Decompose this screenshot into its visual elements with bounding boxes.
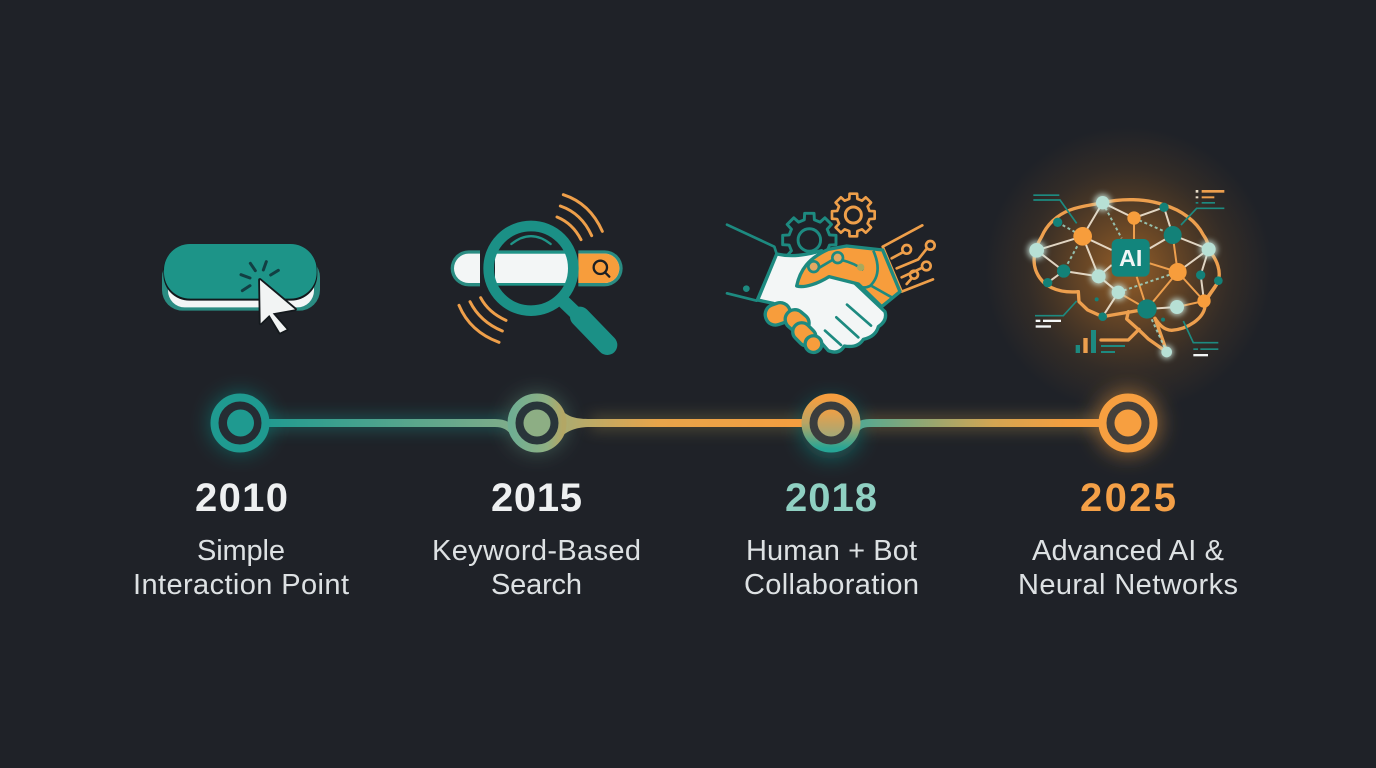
orange nodes (1073, 211, 1211, 308)
icon: button with cursor (2010) (162, 244, 320, 333)
dashed links (1058, 203, 1178, 352)
milestone 2018 text (744, 476, 919, 601)
node: 2018 (806, 398, 856, 448)
pale node glows (1027, 194, 1217, 359)
icon: orange gear (832, 194, 875, 236)
robot arm cuff with circuit traces (883, 225, 935, 292)
milestone 2025 text: Neural Networks (1018, 569, 1238, 601)
robot hand (797, 246, 900, 307)
pale nodes (1029, 196, 1216, 357)
milestone 2018 text: Human + Bot (746, 535, 917, 567)
node: 2010 (214, 398, 266, 448)
milestone 2025 text: Advanced AI & (1032, 535, 1224, 567)
brain outline (1034, 200, 1219, 352)
milestone 2010 text: Simple (197, 535, 285, 567)
timeline (210, 390, 1161, 459)
data callouts (1033, 200, 1224, 343)
milestone 2015 text: Keyword-Based (432, 535, 641, 567)
milestone 2010 text: Interaction Point (133, 569, 349, 601)
teal nodes (1043, 203, 1223, 322)
node: 2025 (1102, 398, 1154, 448)
milestone 2025 text (1018, 476, 1238, 601)
mini bar chart (1076, 330, 1096, 353)
icon: AI neural network brain (2025) (985, 127, 1272, 413)
milestone 2018 text: Collaboration (744, 569, 919, 601)
connector lines (262, 407, 1105, 439)
milestone 2015 text (432, 476, 641, 601)
line glow (262, 417, 1103, 429)
AI chip (1112, 239, 1150, 277)
brain glow (985, 127, 1272, 413)
human cuff (727, 225, 777, 301)
icon: teal gear (783, 213, 836, 267)
node: 2015 (512, 398, 562, 448)
node glows (210, 390, 1161, 459)
milestone 2010 text: 2010 (195, 476, 288, 520)
AI chip: AI (1119, 245, 1142, 271)
icon: magnifying glass over search bar (2015) (451, 195, 623, 345)
icon: human and robot handshake with gears (2018) (727, 194, 935, 356)
human hand (758, 251, 886, 352)
milestone 2025 text: 2025 (1080, 476, 1176, 520)
milestone 2015 text: Search (491, 569, 582, 601)
milestone 2018 text: 2018 (785, 476, 877, 520)
milestone 2015 text: 2015 (491, 476, 582, 520)
brain links (1037, 203, 1209, 317)
human fingers (762, 300, 825, 356)
milestone 2010 text (133, 476, 349, 601)
